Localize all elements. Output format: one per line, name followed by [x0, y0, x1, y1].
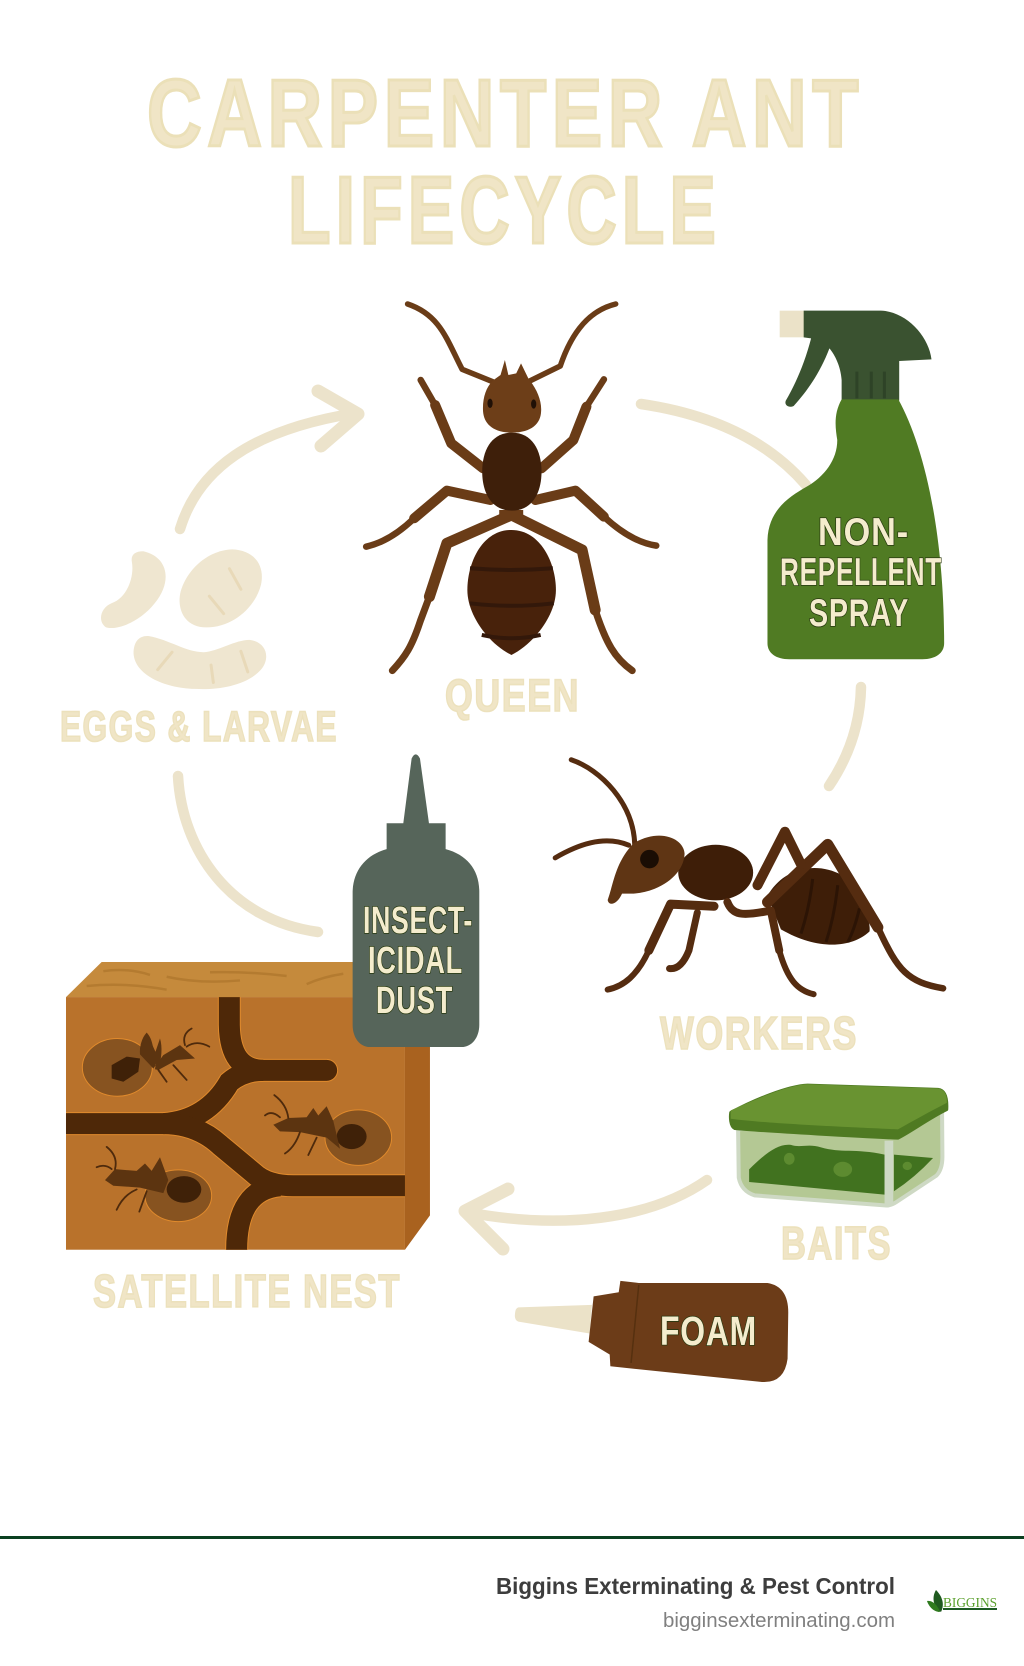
green lid [730, 1085, 947, 1138]
glass container [738, 1112, 942, 1206]
spray bottle body [767, 399, 944, 659]
arrow: eggs and larvae to queen [180, 391, 358, 529]
title [147, 60, 864, 264]
footer logo: BIGGINS [943, 1596, 997, 1611]
nest chamber right [265, 1095, 392, 1165]
footer company name: Biggins Exterminating & Pest Control [496, 1573, 895, 1599]
icon: non-repellent spray bottle [767, 311, 944, 659]
title: LIFECYCLE [288, 157, 721, 264]
arrow: queen to workers, first segment [641, 404, 806, 485]
foam label text: FOAM [660, 1308, 757, 1354]
icon: non-repellent spray bottle: REPELLENT [780, 551, 942, 594]
label: workers: WORKERS [660, 1007, 858, 1059]
queen petiole [499, 510, 523, 520]
icon: queen ant [366, 304, 656, 671]
queen thorax [482, 433, 542, 511]
nest chamber upper left [82, 1029, 209, 1096]
worker head [608, 836, 685, 904]
worker thorax [678, 845, 753, 900]
bait gel [749, 1145, 885, 1195]
footer divider [0, 1536, 1024, 1539]
spray trigger head [785, 311, 931, 407]
arrow: satellite nest to eggs and larvae [178, 776, 318, 932]
label: satellite nest: SATELLITE NEST [93, 1265, 401, 1317]
icon: foam applicator [515, 1281, 788, 1382]
icon: insecticidal dust bottle [353, 754, 479, 1047]
nest side face [405, 962, 430, 1250]
nest front face [66, 997, 405, 1250]
label: eggs and larvae: EGGS & LARVAE [60, 703, 338, 751]
icon: bait container [730, 1084, 947, 1206]
dust bottle label text: INSECT- [363, 900, 473, 942]
icon: eggs and larvae [101, 549, 266, 689]
nest top face [66, 962, 405, 997]
label: queen: QUEEN [445, 670, 580, 721]
icon: insecticidal dust bottle: ICIDAL [368, 940, 463, 982]
nest chamber lower left [97, 1147, 212, 1222]
icon: satellite nest wood block [66, 962, 430, 1250]
icon: insecticidal dust bottle: DUST [376, 980, 453, 1022]
queen head [483, 360, 541, 433]
worker abdomen [768, 868, 870, 945]
worker legs [608, 832, 943, 994]
queen abdomen [467, 530, 556, 655]
foam body [589, 1281, 788, 1382]
arrow: workers to satellite nest [465, 1180, 707, 1249]
footer logo [927, 1590, 997, 1612]
icon: non-repellent spray bottle: SPRAY [809, 592, 909, 635]
footer website: bigginsexterminating.com [663, 1610, 895, 1632]
arrow: queen to workers, second segment [829, 687, 861, 786]
nest tunnels [66, 997, 405, 1250]
icon: worker ant [555, 760, 943, 994]
label: baits: BAITS [781, 1217, 892, 1269]
spray nozzle [780, 311, 804, 337]
spray bottle label text: NON- [818, 511, 909, 554]
foam nozzle [515, 1305, 592, 1333]
